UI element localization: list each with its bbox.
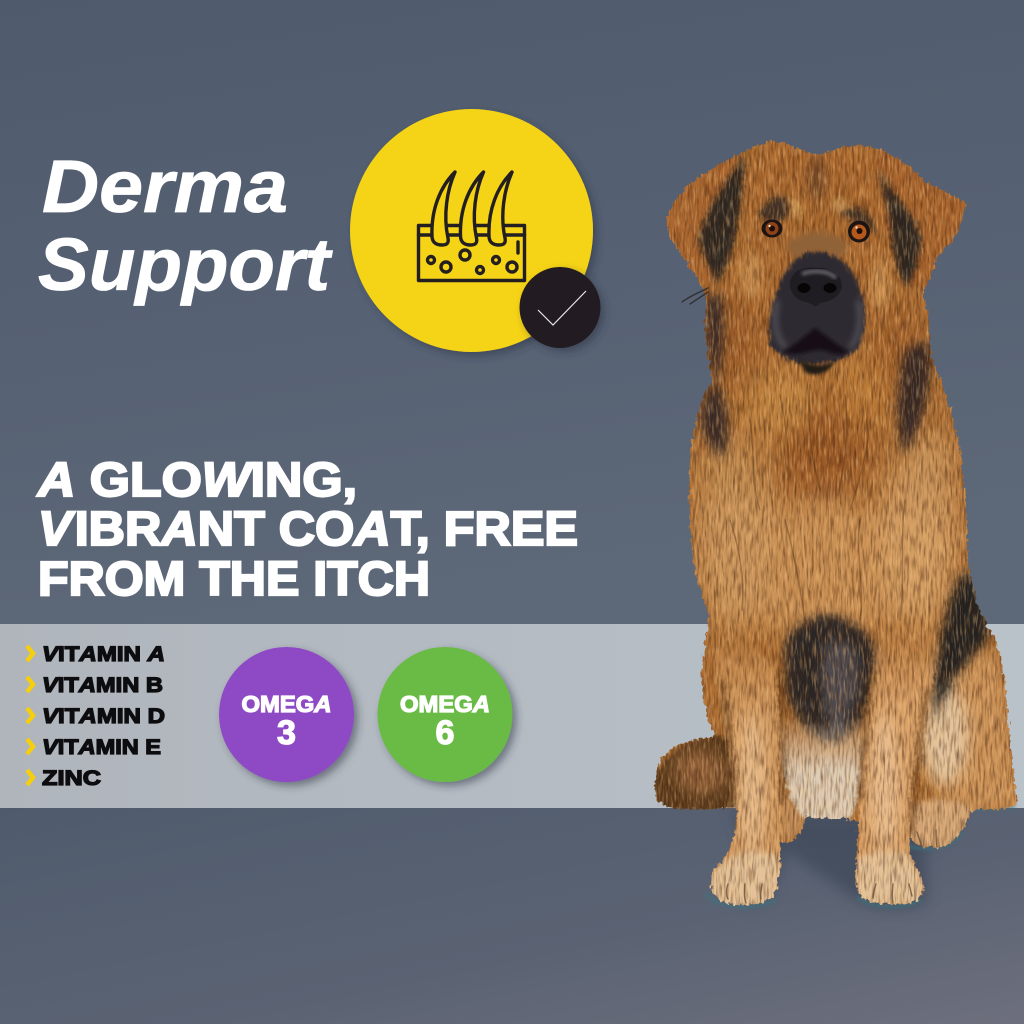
paw toes and claws [726,830,937,903]
brow light [788,196,847,221]
ingredient list [27,643,165,790]
cheeks [741,251,891,313]
right ear [877,148,970,290]
brow dark [757,196,878,235]
black check badge [520,267,600,348]
title: Derma Support: Support [38,223,333,306]
vitamin names: ZINC [42,767,101,790]
omega 3 badge: 3 [277,714,296,752]
background wall [0,0,1024,624]
front left leg highlight [738,715,766,855]
dog coat [640,120,1024,920]
yellow skin badge [350,109,600,352]
title: Derma Support: Derma [42,145,288,228]
face fur [879,178,892,222]
dog muzzle [769,232,865,364]
vitamin names [42,643,165,790]
left ear [666,154,740,280]
headline: a glowing, vibrant coat, free from the itch: VIBRANT COAT, FREE [38,503,578,556]
dog face details [726,220,937,903]
title: Derma Support [38,145,333,306]
right front paw [856,852,925,905]
omega 6 badge: OMEGA [400,691,490,717]
chest dark tuft highlight [822,640,859,738]
chin [798,358,836,375]
muzzle shape [769,252,865,364]
vitamin names: VITAMIN D [42,705,165,728]
muzzle lighter sides [775,300,860,348]
background floor [0,808,1024,1024]
vitamin names: VITAMIN A [42,643,165,666]
omega 3 badge: OMEGA [242,691,332,717]
omega 3 badge [219,647,354,782]
belly white fur [777,712,868,824]
front right leg [850,625,942,905]
omega 6 badge: 6 [436,714,454,752]
stray dark hairs [682,288,708,304]
omega 6 badge [378,647,512,782]
left ear dark fold [698,155,745,285]
headline: a glowing, vibrant coat, free from the itch [37,454,578,606]
vitamin names: VITAMIN B [42,674,163,697]
light strands [720,440,975,780]
tail [650,735,745,815]
front left leg inner shadow [722,670,783,805]
tail highlight [674,750,726,794]
dark markings [700,295,989,720]
yellow circle [350,109,593,352]
dark strands [730,385,905,620]
right ear dark fold [878,168,922,288]
front right leg inner shadow [860,670,928,835]
hind thigh cream [921,685,969,785]
headline: a glowing, vibrant coat, free from the itch: FROM THE ITCH [38,553,430,606]
bridge of nose [786,232,848,260]
chest dark patch [785,615,877,745]
body colour patches [697,152,958,640]
fur strands [682,288,975,780]
icon: skin with hair follicles [418,172,524,280]
hind thigh [921,651,1020,812]
right eye [848,220,870,242]
dog base coat [640,120,1024,920]
mouth [783,328,848,354]
left eye [762,220,782,238]
vitamin names: VITAMIN E [42,736,161,759]
bullet chevrons [27,646,33,785]
left hind paw [780,794,806,845]
floor shadow under dog [706,806,1015,908]
left front paw [708,851,781,910]
nose [790,268,842,306]
light ingredient band [0,624,1024,808]
front right leg highlight [871,715,899,855]
right hind paw [905,799,975,850]
forehead stripe [809,154,825,202]
front left leg [710,642,784,886]
headline: a glowing, vibrant coat, free from the itch: A GLOWING, [37,454,357,507]
